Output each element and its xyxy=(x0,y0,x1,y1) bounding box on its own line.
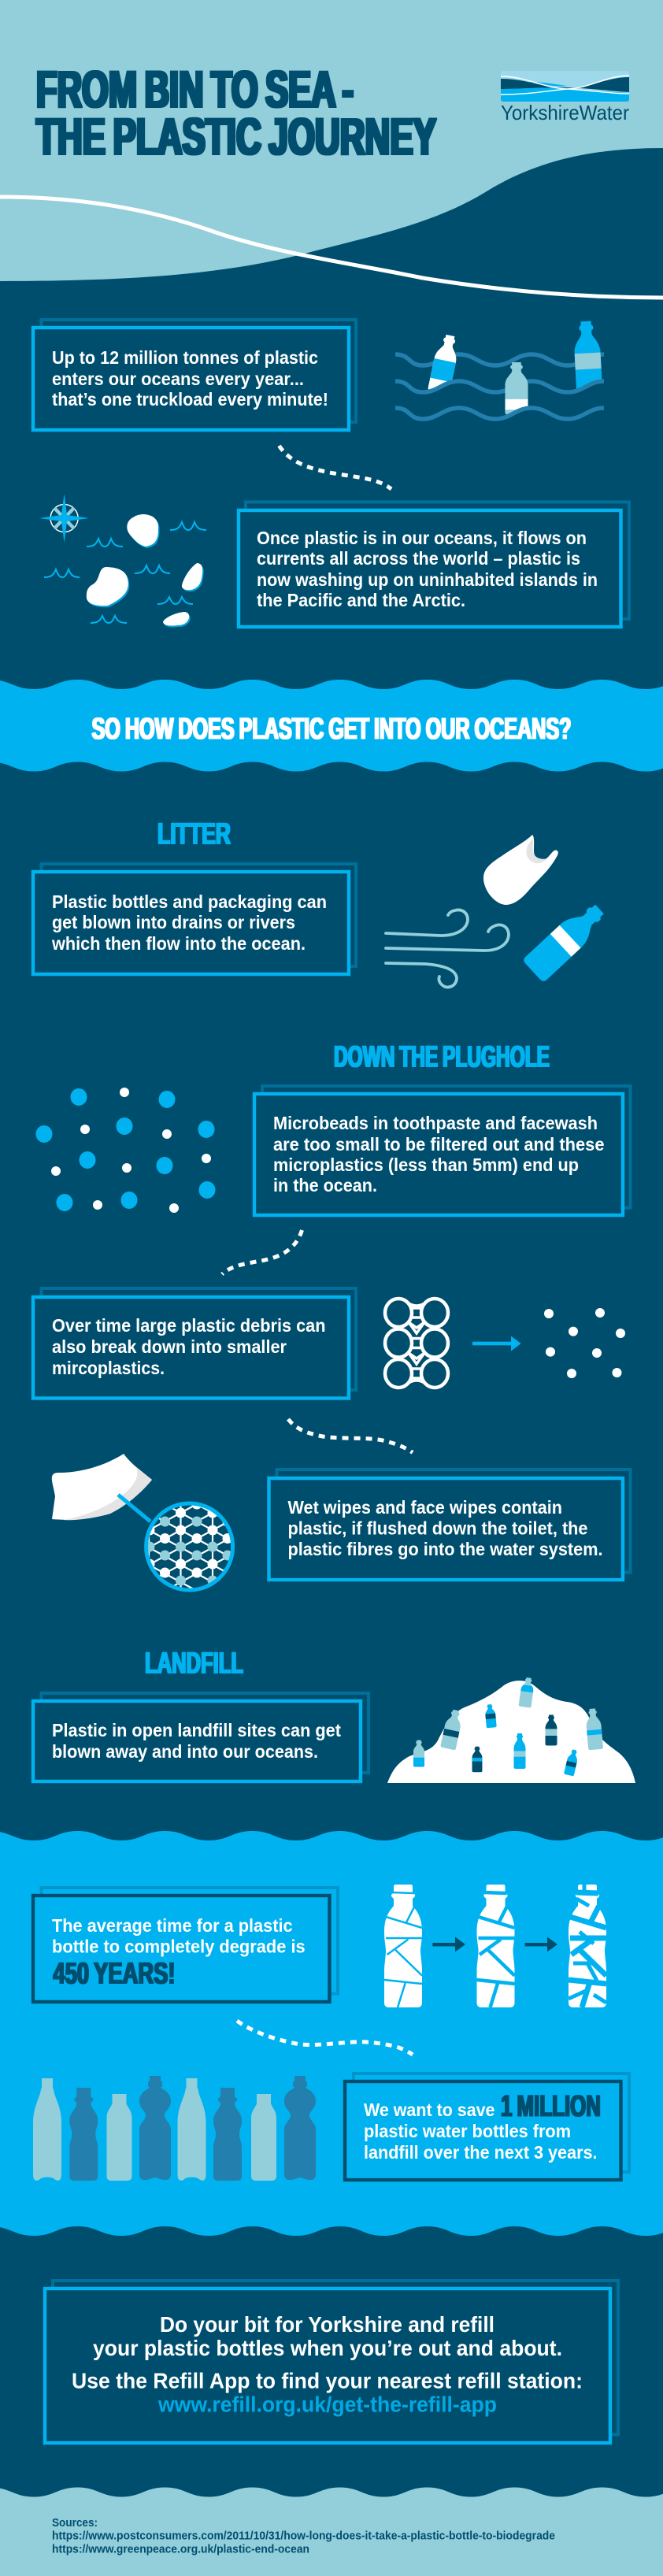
icon: islands xyxy=(87,514,204,628)
panel: microbeads xyxy=(254,1086,630,1215)
panel: plastic on currents: now washing up on uninhabited islands in xyxy=(257,569,598,590)
panel: plastic on currents xyxy=(239,502,629,627)
panel: microbeads: in the ocean. xyxy=(273,1175,377,1195)
panel: 450 years: The average time for a plastic xyxy=(52,1915,293,1936)
sources: https://www.postconsumers.com/2011/10/31/how-long-does-it-take-a-plastic-bottle-to-biodegrade xyxy=(52,2530,555,2543)
heading: down the plughole: DOWN THE PLUGHOLE xyxy=(334,1041,550,1074)
dashed path 1 xyxy=(279,446,391,489)
panel: 1 million bottles: We want to save xyxy=(364,2100,494,2120)
panel: 1 million bottles: 1 MILLION xyxy=(501,2090,601,2123)
panel: litter xyxy=(33,864,356,974)
panel: plastic on currents: Once plastic is in our oceans, it flows on xyxy=(257,528,587,548)
title: THE PLASTIC JOURNEY xyxy=(36,107,436,165)
panel: wet wipes: Wet wipes and face wipes contain xyxy=(288,1497,562,1518)
dashed path 2 xyxy=(222,1230,302,1274)
icon: six-pack rings xyxy=(385,1299,448,1388)
icon: degrading bottle stage 3 xyxy=(569,1885,606,2007)
panel: 450 years xyxy=(33,1888,338,2002)
panel: litter: get blown into drains or rivers xyxy=(52,912,295,932)
panel: debris xyxy=(33,1288,356,1399)
icon: row of bottles xyxy=(33,2076,316,2181)
panel: microbeads: microplastics (less than 5mm) end up xyxy=(273,1155,579,1175)
arrow: degrade 2 xyxy=(524,1937,557,1951)
panel: call to action: Do your bit for Yorkshire and refill xyxy=(160,2312,494,2337)
light sources section xyxy=(0,2487,663,2576)
panel: plastic on currents: currents all across the world – plastic is xyxy=(257,548,580,569)
panel: debris: mircoplastics. xyxy=(52,1358,165,1378)
panel: microbeads: Microbeads in toothpaste and facewash xyxy=(273,1113,598,1133)
panel: 1 million bottles: plastic water bottles from xyxy=(364,2121,571,2141)
logo: Yorkshire Water: YorkshireWater xyxy=(501,101,629,124)
panel: landfill xyxy=(33,1693,369,1781)
panel: 12 million tonnes xyxy=(33,320,356,430)
panel: debris: Over time large plastic debris can xyxy=(52,1315,326,1336)
arrow: degrade 1 xyxy=(432,1937,465,1951)
panel: 12 million tonnes: Up to 12 million tonnes of plastic xyxy=(52,347,318,368)
sources xyxy=(52,2517,555,2556)
panel: litter: Plastic bottles and packaging can xyxy=(52,891,327,912)
panel: 1 million bottles xyxy=(345,2074,629,2180)
panel: 1 million bottles: landfill over the next 3 years. xyxy=(364,2142,597,2163)
arrow: to microplastics xyxy=(472,1336,521,1351)
panel: call to action xyxy=(45,2281,618,2443)
heading: litter: LITTER xyxy=(157,817,231,851)
dashed path 4 xyxy=(237,2021,413,2055)
icon: bottles floating on waves xyxy=(395,321,607,429)
dashed path 3 xyxy=(288,1419,413,1452)
sources: https://www.greenpeace.org.uk/plastic-end-ocean xyxy=(52,2544,309,2556)
icon: degrading bottle stage 1 xyxy=(384,1885,422,2007)
icon: wet wipe xyxy=(52,1454,152,1520)
panel: wet wipes: plastic fibres go into the water system. xyxy=(288,1539,603,1559)
icon: microplastic dots xyxy=(544,1308,625,1378)
cyan lower section xyxy=(0,1831,663,2284)
panel: wet wipes xyxy=(269,1470,630,1580)
panel: call to action: Use the Refill App to find your nearest refill station: xyxy=(72,2368,583,2393)
icon: magnifier with fibres xyxy=(118,1495,238,1593)
panel: landfill: blown away and into our oceans. xyxy=(52,1741,318,1762)
cyan wave band xyxy=(0,680,663,788)
panel: wet wipes: plastic, if flushed down the toilet, the xyxy=(288,1518,587,1539)
icon: microbeads xyxy=(36,1088,216,1213)
icon: landfill mound with bottles xyxy=(387,1677,635,1783)
panel: debris: also break down into smaller xyxy=(52,1336,287,1357)
logo: Yorkshire Water xyxy=(501,71,629,124)
panel: plastic on currents: the Pacific and the Arctic. xyxy=(257,590,465,610)
panel: 450 years: 450 YEARS! xyxy=(54,1958,175,1991)
panel: 12 million tonnes: that’s one truckload every minute! xyxy=(52,389,328,410)
title xyxy=(36,60,436,165)
panel: 12 million tonnes: enters our oceans every year... xyxy=(52,369,304,389)
panel: litter: which then flow into the ocean. xyxy=(51,933,306,954)
icon: plastic bag xyxy=(483,835,558,905)
header light wave xyxy=(0,0,663,281)
panel: 450 years: bottle to completely degrade is xyxy=(52,1936,306,1956)
icon: degrading bottle stage 2 xyxy=(477,1885,515,2007)
heading: landfill: LANDFILL xyxy=(145,1648,243,1681)
header panel xyxy=(0,0,663,298)
panel: call to action: your plastic bottles when you’re out and about. xyxy=(93,2336,562,2360)
sources: Sources: xyxy=(52,2517,98,2530)
panel: microbeads: are too small to be filtered out and these xyxy=(273,1134,605,1155)
icon: blown bottle xyxy=(524,904,604,981)
dark footer section xyxy=(0,2226,663,2520)
icon: small waves xyxy=(44,522,206,623)
panel: landfill: Plastic in open landfill sites can get xyxy=(52,1720,341,1740)
dark wave under band xyxy=(0,762,663,795)
icon: compass xyxy=(39,494,89,543)
panel: call to action: www.refill.org.uk/get-the-refill-app xyxy=(157,2393,497,2417)
header white line xyxy=(0,197,663,298)
icon: wind xyxy=(386,910,509,988)
title: FROM BIN TO SEA - xyxy=(36,60,354,118)
